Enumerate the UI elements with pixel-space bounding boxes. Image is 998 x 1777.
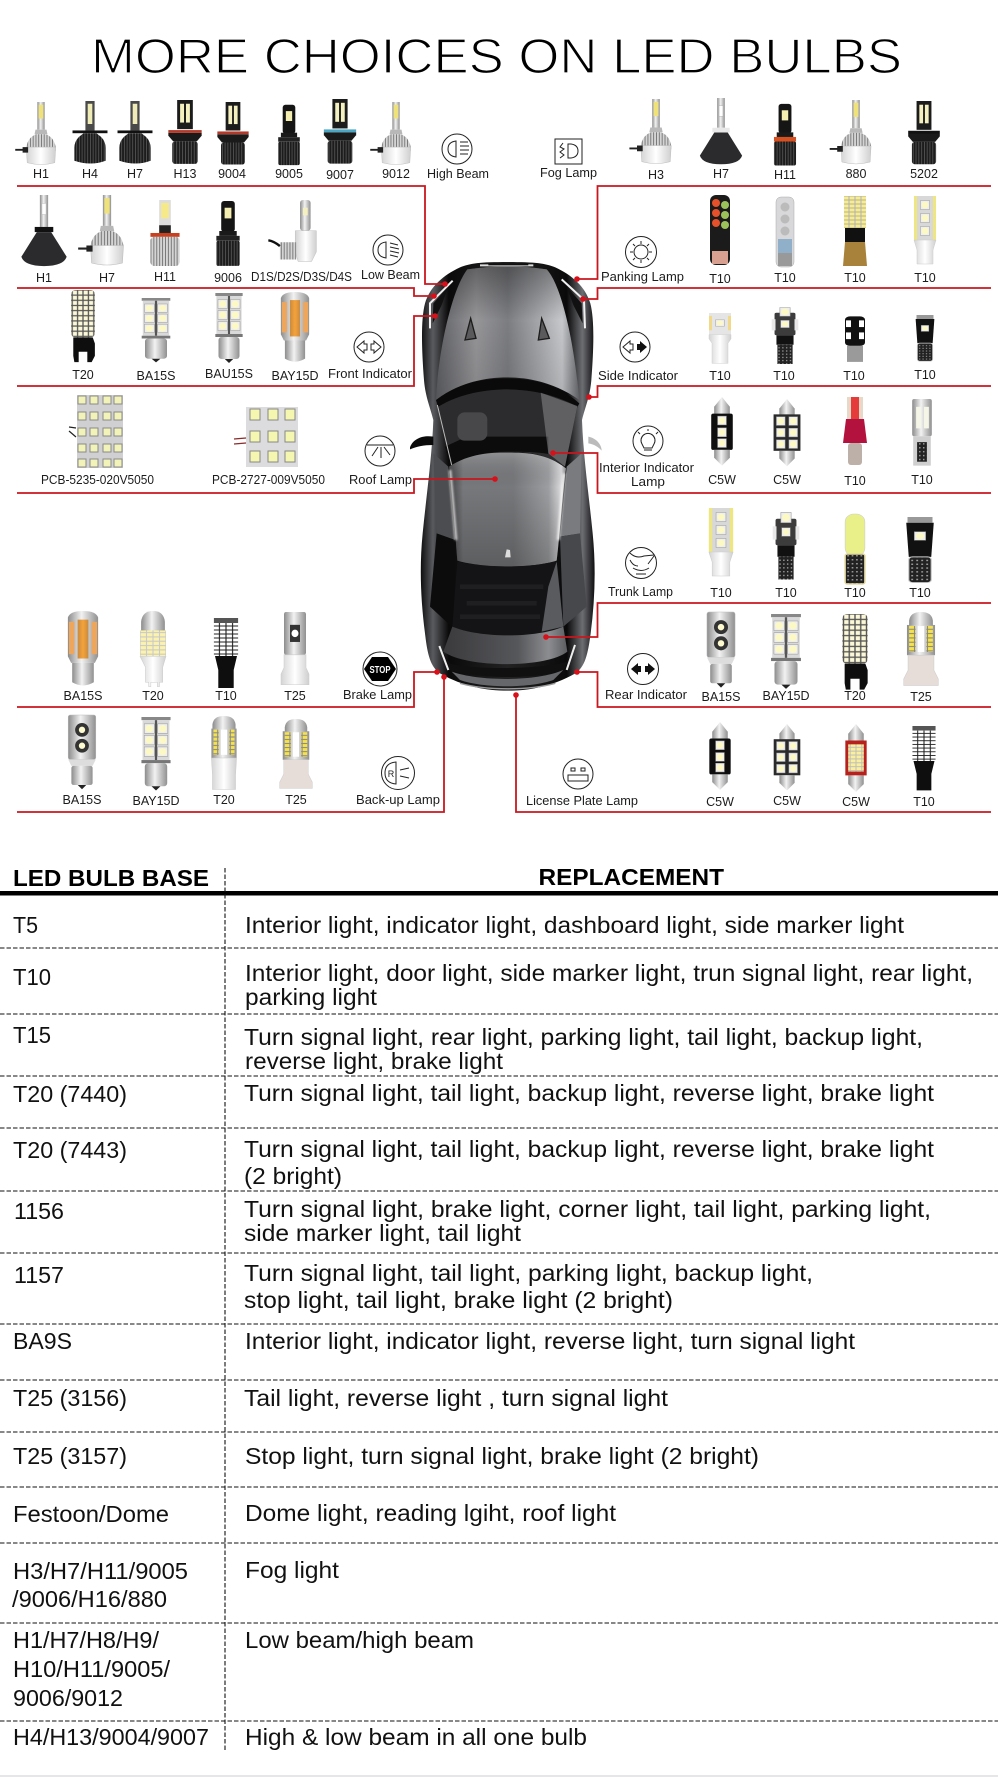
row festoon: Festoon/Dome: [13, 1501, 169, 1527]
row T20 7443: (2 bright): [244, 1163, 342, 1189]
row high and low: [13, 1724, 587, 1750]
row 1156: side marker light, tail light: [244, 1220, 522, 1246]
panel: brake lamp: BA15S: [64, 689, 102, 703]
panel: license plate lamp: License Plate Lamp: [526, 794, 638, 808]
panel: fog lamp: H11: [774, 168, 796, 182]
panel: front indicator: [71, 290, 412, 383]
row 1157: [14, 1260, 813, 1313]
panel: low beam: D1S/D2S/D3S/D4S: [251, 270, 352, 284]
panel: license plate lamp: C5W: [842, 795, 870, 809]
panel: interior indicator lamp: Lamp: [631, 475, 665, 489]
panel: front indicator: BAY15D: [271, 369, 319, 383]
panel: high beam: H1: [33, 167, 49, 181]
panel: interior indicator lamp: Interior Indicator: [599, 461, 694, 475]
panel: trunk lamp: T10: [844, 586, 866, 600]
pcb 2727 board: [234, 407, 298, 467]
panel: rear indicator: [605, 612, 938, 704]
panel: rear indicator: BA15S: [702, 690, 740, 704]
panel: license plate lamp: C5W: [706, 795, 734, 809]
panel: rear indicator: T25: [910, 690, 932, 704]
row fog: /9006/H16/880: [12, 1586, 167, 1612]
table header: REPLACEMENT: [538, 864, 724, 890]
panel: fog lamp: [540, 98, 940, 182]
row 1157: 1157: [14, 1262, 64, 1288]
row T20 7443: [13, 1136, 935, 1189]
panel: brake lamp: [64, 611, 412, 703]
panel: fog lamp: H7: [713, 167, 729, 181]
row 1156: [14, 1196, 931, 1246]
panel: side indicator: T10: [914, 368, 936, 382]
row T25 3156: [13, 1385, 669, 1411]
row T5: T5: [13, 912, 38, 938]
row low beam high beam: Low beam/high beam: [245, 1627, 474, 1653]
row T10: Interior light, door light, side marker light, trun signal light, rear light,: [245, 960, 973, 986]
leader lines and dots: [17, 186, 991, 812]
table header: [0, 864, 998, 896]
panel: interior indicator lamp: [599, 397, 933, 489]
panel: back-up lamp: BAY15D: [132, 794, 180, 808]
panel: low beam: 9006: [214, 271, 242, 285]
panel: rear indicator: BAY15D: [762, 689, 810, 703]
panel: high beam: 9012: [382, 167, 410, 181]
row high and low: H4/H13/9004/9007: [13, 1724, 209, 1750]
panel: brake lamp: Brake Lamp: [343, 688, 412, 702]
row T20 7440: [13, 1080, 935, 1107]
row T25 3156: Tail light, reverse light , turn signal light: [244, 1385, 669, 1411]
row 1156: 1156: [14, 1198, 64, 1224]
panel: back-up lamp: T25: [285, 793, 307, 807]
row high and low: High & low beam in all one bulb: [245, 1724, 587, 1750]
panel: high beam: [15, 99, 489, 182]
panel: side indicator: Side Indicator: [598, 369, 678, 383]
panel: fog lamp: 5202: [910, 167, 938, 181]
panel: rear indicator: T20: [844, 689, 866, 703]
pcb 5235 board: [69, 395, 123, 468]
panel: parking lamp: T10: [844, 271, 866, 285]
panel: front indicator: BA15S: [137, 369, 175, 383]
row festoon: Dome light, reading lgiht, roof light: [245, 1500, 617, 1526]
row T20 7443: Turn signal light, tail light, backup light, reverse light, brake light: [244, 1136, 935, 1162]
row T15: reverse light, brake light: [245, 1048, 504, 1074]
row low beam high beam: 9006/9012: [13, 1685, 123, 1711]
panel: back-up lamp: Back-up Lamp: [356, 793, 440, 807]
panel: interior indicator lamp: C5W: [773, 473, 801, 487]
panel: front indicator: Front Indicator: [328, 367, 412, 381]
row low beam high beam: H1/H7/H8/H9/: [13, 1627, 160, 1653]
panel: side indicator: [598, 308, 936, 383]
panel: side indicator: T10: [709, 369, 731, 383]
table: bulb base to replacement: [0, 864, 998, 1751]
panel: high beam: H7: [127, 167, 143, 181]
panel: brake lamp: T10: [215, 689, 237, 703]
row T10: parking light: [245, 984, 378, 1010]
panel: high beam: 9005: [275, 167, 303, 181]
panel: low beam: H1: [36, 271, 52, 285]
panel: interior indicator lamp: T10: [911, 473, 933, 487]
row T10: T10: [13, 964, 51, 990]
panel: interior indicator lamp: C5W: [708, 473, 736, 487]
panel: parking lamp: [601, 195, 936, 286]
panel: trunk lamp: T10: [909, 586, 931, 600]
row festoon: [13, 1500, 617, 1527]
panel: high beam: 9007: [326, 168, 354, 182]
row fog: Fog light: [245, 1557, 340, 1583]
row 1157: Turn signal light, tail light, parking light, backup light,: [244, 1260, 813, 1286]
panel: high beam: 9004: [218, 167, 246, 181]
panel: back-up lamp: T20: [213, 793, 235, 807]
panel: license plate lamp: [526, 722, 936, 809]
panel: roof lamp: [41, 395, 412, 487]
table header: LED BULB BASE: [13, 865, 209, 891]
row BA9S: [13, 1328, 856, 1354]
panel: low beam: H11: [154, 270, 176, 284]
row T25 3157: [13, 1443, 759, 1469]
panel: roof lamp: PCB-2727-009V5050: [212, 473, 325, 487]
panel: side indicator: T10: [843, 369, 865, 383]
panel: trunk lamp: T10: [775, 586, 797, 600]
panel: roof lamp: PCB-5235-020V5050: [41, 473, 154, 487]
row 1157: stop light, tail light, brake light (2 bright): [244, 1287, 673, 1313]
row T15: Turn signal light, rear light, parking light, tail light, backup light,: [244, 1024, 923, 1050]
panel: brake lamp: T20: [142, 689, 164, 703]
row fog: [12, 1557, 340, 1612]
panel: high beam: High Beam: [427, 167, 489, 181]
title: MORE CHOICES ON LED BULBS: [91, 30, 902, 84]
panel: high beam: H13: [174, 167, 197, 181]
row T15: T15: [13, 1022, 51, 1048]
row low beam high beam: [13, 1627, 474, 1711]
row T25 3156: T25 (3156): [13, 1385, 127, 1411]
panel: trunk lamp: Trunk Lamp: [608, 585, 673, 599]
row T20 7440: T20 (7440): [13, 1081, 127, 1107]
row T20 7440: Turn signal light, tail light, backup light, reverse light, brake light: [244, 1080, 935, 1106]
panel: front indicator: T20: [72, 368, 94, 382]
row T25 3157: T25 (3157): [13, 1443, 127, 1469]
panel: trunk lamp: [608, 508, 934, 600]
row T25 3157: Stop light, turn signal light, brake light (2 bright): [245, 1443, 759, 1469]
row fog: H3/H7/H11/9005: [13, 1558, 188, 1584]
panel: low beam: Low Beam: [361, 268, 420, 282]
row T20 7443: T20 (7443): [13, 1137, 127, 1163]
row BA9S: BA9S: [13, 1328, 72, 1354]
panel: low beam: [21, 195, 420, 285]
panel: parking lamp: T10: [774, 271, 796, 285]
panel: brake lamp: T25: [284, 689, 306, 703]
panel: brake lamp: STOP: [370, 665, 391, 676]
panel: parking lamp: T10: [709, 272, 731, 286]
row T5: [13, 912, 905, 938]
panel: front indicator: BAU15S: [205, 367, 253, 381]
row 1156: Turn signal light, brake light, corner light, tail light, parking light,: [244, 1196, 931, 1222]
panel: rear indicator: Rear Indicator: [605, 688, 687, 702]
panel: parking lamp: Panking Lamp: [601, 270, 684, 284]
panel: low beam: H7: [99, 271, 115, 285]
car top view: [410, 262, 602, 691]
panel: trunk lamp: T10: [710, 586, 732, 600]
panel: roof lamp: Roof Lamp: [349, 473, 412, 487]
row T5: Interior light, indicator light, dashboard light, side marker light: [245, 912, 905, 938]
panel: back-up lamp: R: [388, 769, 395, 779]
row low beam high beam: H10/H11/9005/: [13, 1656, 171, 1682]
row BA9S: Interior light, indicator light, reverse light, turn signal light: [245, 1328, 856, 1354]
row T10: [13, 960, 973, 1010]
panel: high beam: H4: [82, 167, 98, 181]
panel: back-up lamp: [63, 715, 440, 808]
panel: parking lamp: T10: [914, 271, 936, 285]
panel: fog lamp: H3: [648, 168, 664, 182]
row T15: [13, 1022, 923, 1074]
panel: fog lamp: 880: [846, 167, 866, 181]
panel: license plate lamp: C5W: [773, 794, 801, 808]
panel: fog lamp: Fog Lamp: [540, 166, 597, 180]
panel: back-up lamp: BA15S: [63, 793, 101, 807]
panel: license plate lamp: T10: [913, 795, 935, 809]
panel: side indicator: T10: [773, 369, 795, 383]
panel: interior indicator lamp: T10: [844, 474, 866, 488]
